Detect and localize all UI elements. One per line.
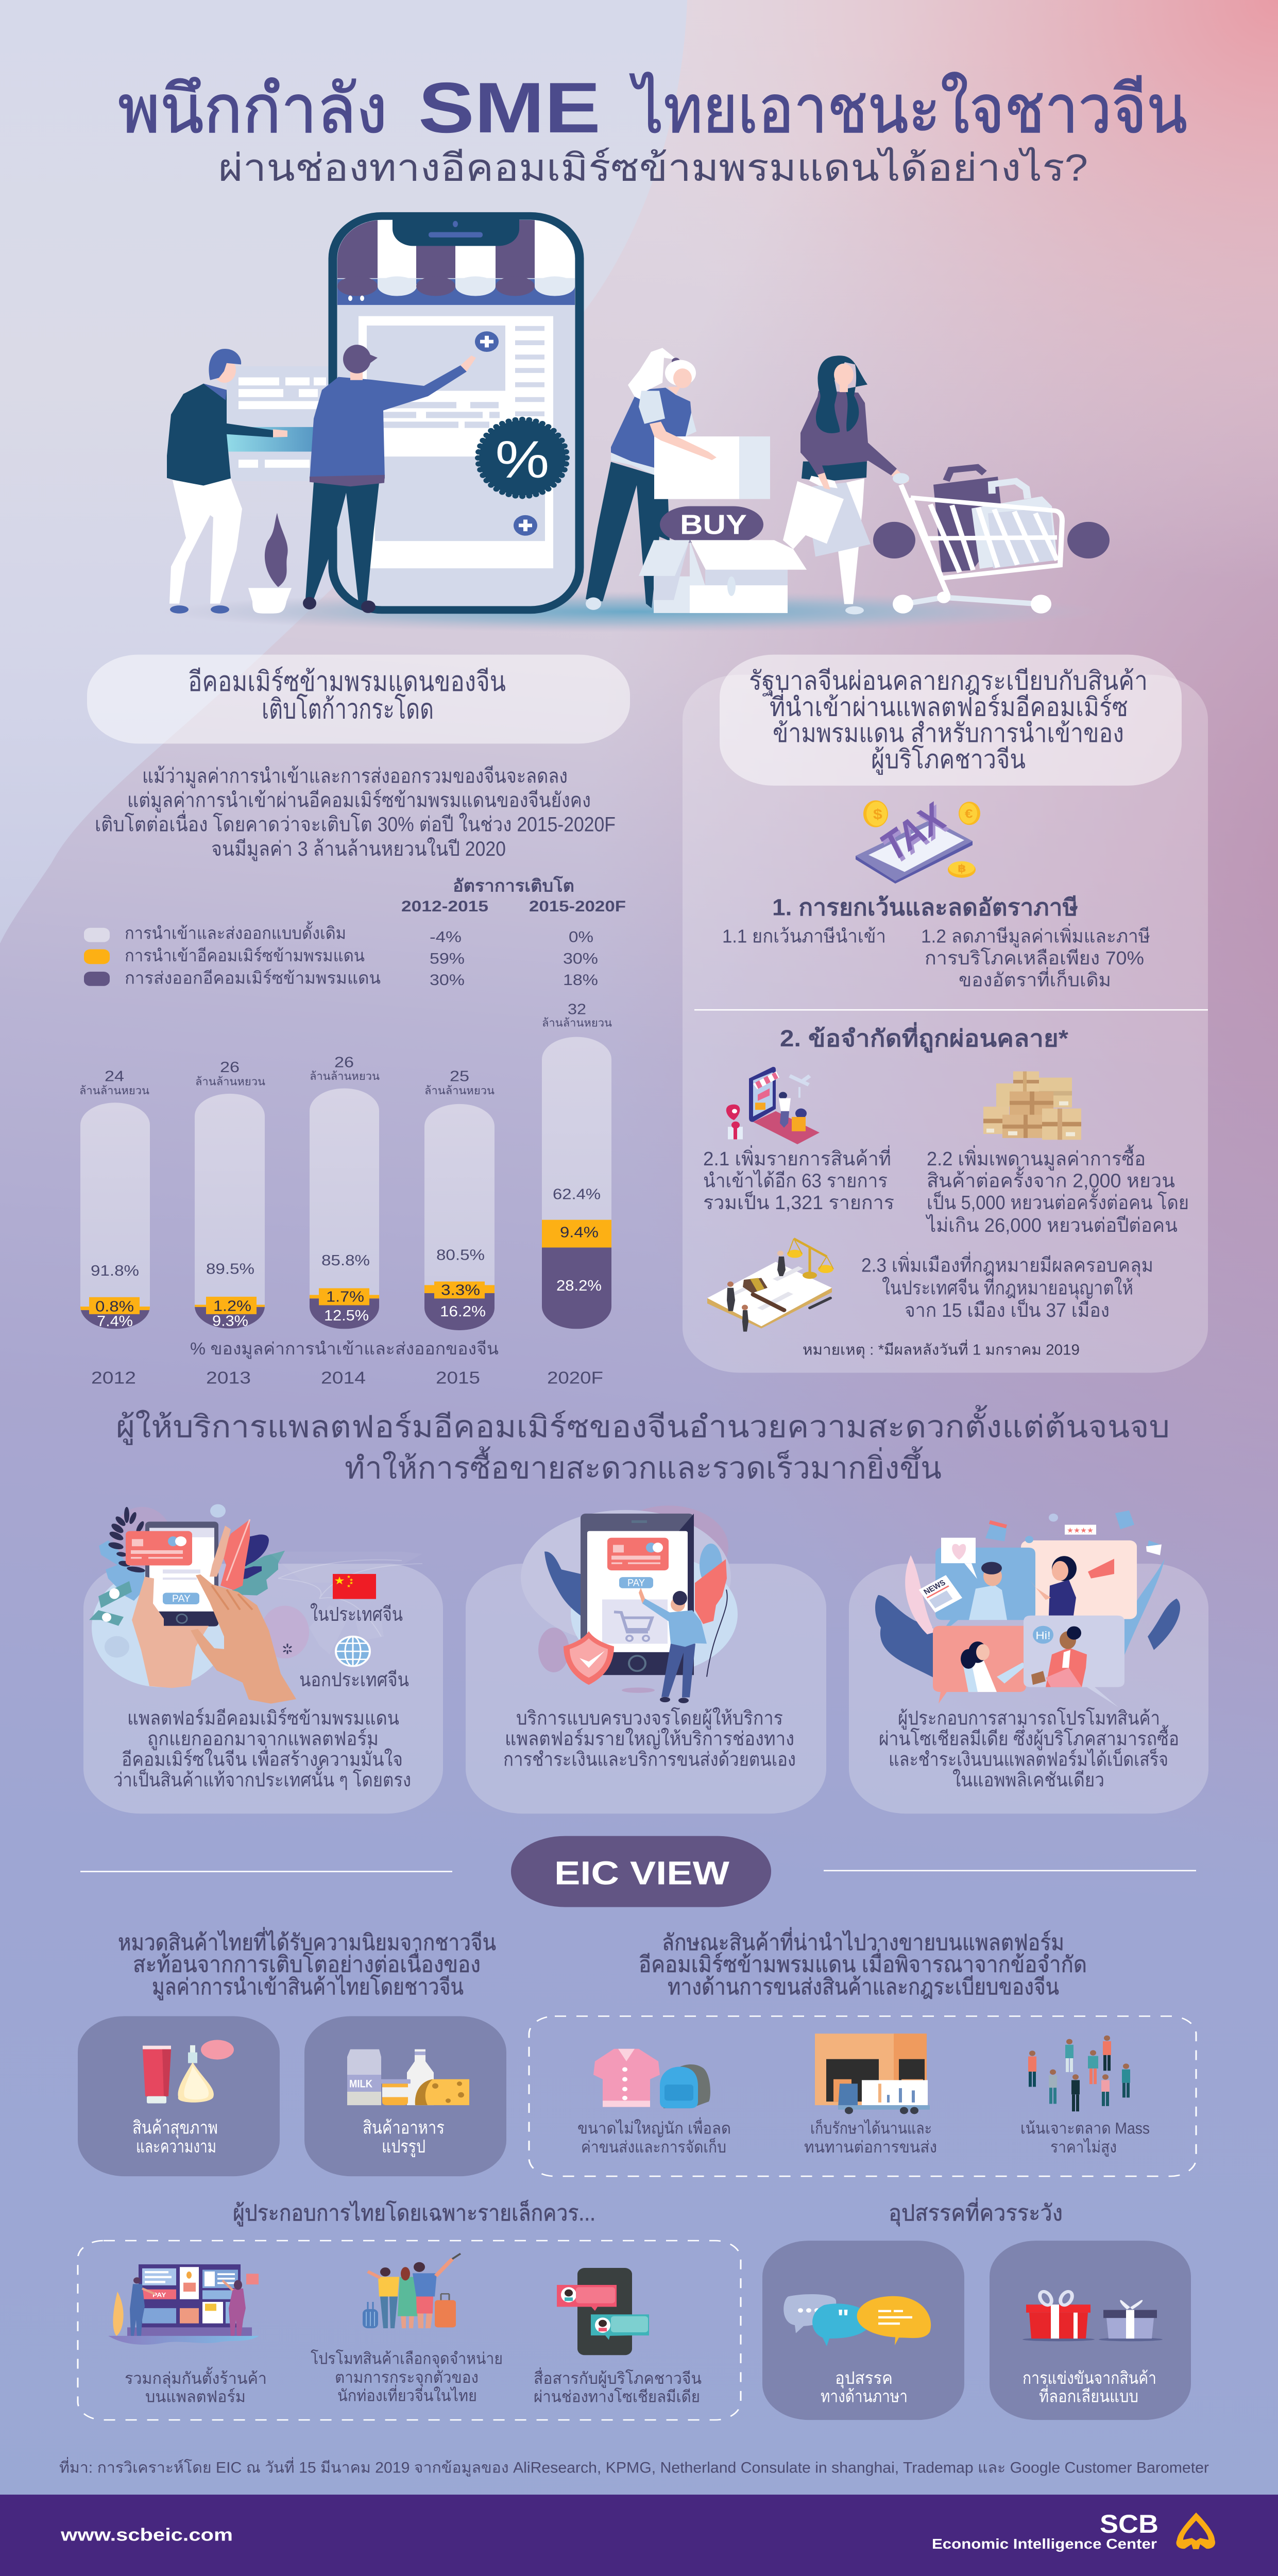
icon: china flag (333, 1574, 376, 1599)
card text: ถูกแยกออกมาจากแพลตฟอร์ม (147, 1728, 379, 1751)
icon: phone with chat bubbles (557, 2268, 649, 2355)
website: www.scbeic.com (60, 2524, 233, 2545)
bar 2015: 3.3% (441, 1281, 480, 1298)
chat bubble: lavender (1024, 1616, 1124, 1707)
action captions: โปรโมทสินค้าเลือกจุดจำหน่าย (311, 2349, 503, 2368)
paragraph: cross-border growth: จนมีมูลค่า 3 ล้านล้านหยวนในปี 2020 (211, 837, 506, 861)
bar 2015 (424, 1068, 495, 1387)
card label (363, 2117, 445, 2157)
growth rate table and legend: -4% (430, 928, 462, 945)
text 1.2: 1.2 ลดภาษีมูลค่าเพิ่มและภาษี (921, 923, 1150, 947)
growth rate table and legend: อัตราการเติบโต (453, 875, 574, 895)
card label: ที่ลอกเลียนแบบ (1039, 2384, 1138, 2406)
growth rate table and legend (84, 875, 626, 988)
pay button: PAY (627, 1578, 645, 1588)
bar 2014: 1.7% (326, 1289, 364, 1305)
credit card (126, 1531, 192, 1566)
chat bubble: blue (935, 1548, 1051, 1634)
heading: section 2: 2. ข้อจำกัดที่ถูกผ่อนคลาย* (780, 1022, 1068, 1053)
label: in china: ในประเทศจีน (310, 1603, 403, 1625)
trait captions: เน้นเจาะตลาด Mass (1020, 2120, 1150, 2138)
card: health and beauty (78, 2016, 280, 2176)
text 1.1: 1.1 ยกเว้นภาษีนำเข้า (722, 926, 886, 947)
credit card (607, 1538, 669, 1570)
trait captions: ค่าขนส่งและการจัดเก็บ (581, 2137, 726, 2157)
trait captions: ทนทานต่อการขนส่ง (804, 2138, 937, 2157)
icon: tax phone and coins: TAX (878, 796, 954, 874)
text 2.2: 2.2 เพิ่มเพดานมูลค่าการซื้อ (927, 1144, 1146, 1171)
card text (503, 1707, 796, 1770)
icon: globe (336, 1637, 370, 1666)
card text: อีคอมเมิร์ซในจีน เพื่อสร้างความมั่นใจ (122, 1745, 403, 1770)
bar 2013: 2013 (206, 1368, 251, 1387)
bar 2020F: 9.4% (560, 1224, 599, 1241)
trait captions: ขนาดไม่ใหญ่นัก เพื่อลด (577, 2117, 731, 2138)
bar 2015: 2015 (436, 1368, 480, 1387)
heading: obstacles: อุปสรรคที่ควรระวัง (889, 2198, 1063, 2227)
icon: speech bubbles: " (837, 2305, 849, 2330)
pay button: PAY (172, 1593, 191, 1604)
icon: phone checkout with shopper and shield (521, 1505, 738, 1703)
newspaper: NEWS (922, 1579, 947, 1597)
bar 2014: 26 (334, 1054, 354, 1071)
panel: left heading pill: อีคอมเมิร์ซข้ามพรมแดนของจีน (188, 666, 506, 697)
action captions: ผ่านช่องทางโซเชียลมีเดีย (534, 2387, 700, 2406)
bar 2013: 9.3% (212, 1312, 248, 1329)
growth rate table and legend: 2012-2015 (401, 897, 488, 914)
action captions: ตามการกระจุกตัวของ (335, 2368, 479, 2387)
panel heading: ที่นำเข้าผ่านแพลตฟอร์มอีคอมเมิร์ซ (770, 689, 1128, 722)
paragraph: cross-border growth: เติบโตต่อเนื่อง โดยคาดว่าจะเติบโต 30% ต่อปี ในช่วง 2015-2020F (95, 810, 616, 836)
bar 2020F (542, 1001, 612, 1387)
text 2.1: 2.1 เพิ่มรายการสินค้าที่ (703, 1145, 891, 1170)
bar 2012: 91.8% (91, 1262, 139, 1279)
heading: popular thai goods: สะท้อนจากการเติบโตอย่างต่อเนื่องของ (133, 1949, 481, 1977)
tourist in yellow (368, 2267, 399, 2328)
tourist in green (398, 2267, 418, 2328)
bar 2013: 1.2% (213, 1298, 251, 1314)
icon: tax phone and coins: € (965, 806, 973, 821)
icon: tax phone and coins: ฿ (958, 862, 966, 874)
card label: สินค้าสุขภาพ (132, 2117, 218, 2139)
panel: left heading pill: เติบโตก้าวกระโดด (262, 693, 434, 725)
card text: ผ่านโซเชียลมีเดีย ซึ่งผู้บริโภคสามารถซื้อ (879, 1725, 1179, 1751)
panel heading: ข้ามพรมแดน สำหรับการนำเข้าของ (773, 718, 1124, 748)
payment card behind man (227, 366, 340, 481)
icon: china flag: ★ (334, 1574, 345, 1587)
floating icons (985, 1511, 1162, 1555)
text 2.2 (925, 1144, 1189, 1236)
text 2.1: รวมเป็น 1,321 รายการ (703, 1191, 894, 1213)
chat bubble: peach (1021, 1540, 1137, 1619)
bar 2020F: ล้านล้านหยวน (542, 1016, 612, 1029)
text 1.2: การบริโภคเหลือเพียง 70% (925, 947, 1144, 969)
bar 2015: 16.2% (440, 1303, 486, 1320)
card: processed food (304, 2016, 506, 2176)
panel: full-service card (466, 1505, 826, 1814)
icon: social media chat (875, 1511, 1180, 1707)
open box (639, 540, 807, 613)
panel: regulation relaxation (683, 655, 1208, 1372)
left suitcase (363, 2302, 378, 2328)
bar 2013: 26 (220, 1059, 240, 1076)
growth rate table and legend: 2015-2020F (529, 897, 626, 914)
panel: product traits dashed (529, 2016, 1196, 2176)
newspaper (919, 1575, 962, 1613)
growth rate table and legend: การนำเข้าอีคอมเมิร์ซข้ามพรมแดน (125, 946, 365, 965)
card text: การชำระเงินและบริการขนส่งด้วยตนเอง (503, 1749, 796, 1770)
card label: สินค้าอาหาร (363, 2117, 445, 2138)
bar 2020F: 62.4% (553, 1186, 601, 1202)
bar 2012: ล้านล้านหยวน (79, 1084, 149, 1096)
growth rate table and legend: 0% (569, 928, 593, 945)
icon: cardboard boxes (983, 1072, 1081, 1140)
text 2.3 (861, 1251, 1153, 1321)
card label: การแข่งขันจากสินค้า (1023, 2368, 1156, 2387)
text 2.2: เป็น 5,000 หยวนต่อครั้งต่อคน โดย (927, 1188, 1189, 1213)
heading: popular thai goods: หมวดสินค้าไทยที่ได้รับความนิยมจากชาวจีน (118, 1927, 496, 1955)
heading: product traits (639, 1927, 1087, 1999)
paragraph: cross-border growth: แต่มูลค่าการนำเข้าผ่านอีคอมเมิร์ซข้ามพรมแดนของจีนยังคง (127, 789, 591, 813)
text 1.2: ของอัตราที่เก็บเดิม (959, 967, 1111, 991)
bar 2015: 25 (450, 1068, 469, 1084)
tourist with selfie stick (413, 2253, 461, 2328)
heading: platform convenience (116, 1404, 1170, 1485)
panel: recommended actions dashed (78, 2241, 741, 2420)
text 2.3: 2.3 เพิ่มเมืองที่กฎหมายมีผลครอบคลุม (861, 1251, 1153, 1277)
action captions: บนแพลตฟอร์ม (145, 2388, 246, 2406)
bar 2014: ล้านล้านหยวน (310, 1070, 380, 1082)
icon: store phone with courier (726, 1067, 820, 1144)
text 2.3: จาก 15 เมือง เป็น 37 เมือง (905, 1299, 1110, 1321)
growth rate table and legend: 30% (563, 950, 598, 967)
card label (132, 2117, 218, 2157)
pay button (619, 1577, 653, 1588)
growth rate table and legend: 18% (563, 971, 598, 988)
action captions (125, 2349, 702, 2406)
hero illustration: shoppers and phone storefront (162, 216, 1110, 632)
icon: speech bubbles (783, 2294, 931, 2346)
growth rate table and legend: 59% (430, 950, 465, 967)
trait captions: ราคาไม่สูง (1050, 2138, 1117, 2157)
text 2.1: นำเข้าได้อีก 63 รายการ (703, 1170, 888, 1192)
heading: product traits: ทางด้านการขนส่งสินค้าและกฎระเบียบของจีน (668, 1974, 1059, 1999)
bar 2014: 12.5% (324, 1307, 369, 1324)
card: language barrier (762, 2241, 964, 2420)
bar 2014: 85.8% (321, 1252, 370, 1269)
icon: china flag: ★ (349, 1581, 353, 1585)
buy sign (660, 506, 763, 543)
trait captions: เก็บรักษาได้นานและ (810, 2119, 932, 2138)
heart card (941, 1538, 977, 1579)
label: outside china: นอกประเทศจีน (299, 1669, 409, 1690)
bar 2020F: 32 (568, 1001, 586, 1018)
icon: shirt and backpack (593, 2049, 710, 2108)
icon: online store wall: PAY (152, 2291, 166, 2298)
icon: tax phone and coins: $ (873, 807, 882, 822)
bar 2014: 2014 (321, 1368, 366, 1387)
heading: section 1: 1. การยกเว้นและลดอัตราภาษี (772, 895, 1078, 921)
text 2.2: สินค้าต่อครั้งจาก 2,000 หยวน (927, 1166, 1175, 1192)
scb wordmark: Economic Intelligence Center (932, 2536, 1157, 2552)
stacked bar chart (79, 1001, 612, 1387)
icon: law book, gavel and scale (707, 1239, 833, 1332)
EIC VIEW banner: EIC VIEW (554, 1854, 730, 1891)
discount badge (478, 419, 567, 496)
text 2.3: ในประเทศจีน ที่กฎหมายอนุญาตให้ (882, 1274, 1133, 1300)
card label (821, 2368, 908, 2406)
heading: popular thai goods (118, 1927, 496, 2001)
ground shadow (162, 591, 1110, 632)
heading: popular thai goods: มูลค่าการนำเข้าสินค้าไทยโดยชาวจีน (152, 1974, 464, 2001)
phone storefront (333, 216, 580, 610)
card text: ผู้ประกอบการสามารถโปรโมทสินค้า (898, 1707, 1160, 1730)
icon: chinese tourists (363, 2253, 461, 2328)
bar 2012: 2012 (91, 1368, 136, 1387)
icon: tax phone and coins: TAX (876, 793, 951, 871)
icon: online store wall (108, 2264, 259, 2345)
icon: tax phone and coins (856, 793, 980, 884)
bar 2013 (195, 1059, 265, 1387)
chat bubble: lavender: Hi! (1035, 1630, 1051, 1641)
shopping cart (873, 467, 1110, 614)
right suitcase (435, 2294, 456, 2327)
icon: milk, bottle, jar, cheese: MILK (349, 2078, 373, 2090)
card label: ทางด้านภาษา (821, 2387, 908, 2406)
card label: อุปสรรค (835, 2368, 893, 2388)
bar 2015: ล้านล้านหยวน (424, 1084, 495, 1096)
scb logo (1176, 2513, 1215, 2549)
icon: china flag: ★ (347, 1584, 351, 1588)
text 1.2 (921, 923, 1150, 991)
bar 2013: 89.5% (206, 1261, 254, 1277)
card label: และความงาม (136, 2137, 216, 2157)
floating icons: ★★★★ (1067, 1527, 1094, 1535)
icon: hand holding phone with pay button (89, 1504, 309, 1704)
card text: บริการแบบครบวงจรโดยผู้ให้บริการ (516, 1707, 783, 1730)
growth rate table and legend: การนำเข้าและส่งออกแบบดั้งเดิม (125, 921, 346, 943)
bar 2012: 24 (105, 1068, 124, 1084)
card text: ในแอพพลิเคชันเดียว (952, 1769, 1104, 1791)
potted plant (248, 513, 292, 614)
icon: china flag: ★ (349, 1577, 353, 1582)
card label: แปรรูป (382, 2137, 425, 2157)
scb wordmark (932, 2509, 1158, 2552)
card text (113, 1707, 411, 1791)
card text: แพลตฟอร์มอีคอมเมิร์ซข้ามพรมแดน (127, 1707, 399, 1729)
panel heading (749, 666, 1148, 775)
icon: gifts (1023, 2290, 1163, 2341)
icon: china flag: ★ (347, 1574, 351, 1579)
buy sign: BUY (680, 509, 747, 540)
heading: platform convenience: ผู้ให้บริการแพลตฟอร์มอีคอมเมิร์ซของจีนอำนวยความสะดวกตั้งแต่ต้นจนจบ (116, 1404, 1170, 1445)
man with card (167, 349, 287, 614)
paragraph: cross-border growth (95, 765, 616, 861)
bar 2012: 7.4% (97, 1313, 133, 1330)
icon: cream tube and perfume (143, 2040, 234, 2104)
card text (879, 1707, 1179, 1791)
bar 2013: ล้านล้านหยวน (195, 1075, 265, 1088)
scb wordmark: SCB (1100, 2509, 1158, 2538)
text 2.2: ไม่เกิน 26,000 หยวนต่อปีต่อคน (925, 1214, 1178, 1236)
woman holding box (586, 348, 770, 610)
pay button (163, 1592, 199, 1604)
subtitle: ผ่านช่องทางอีคอมเมิร์ซข้ามพรมแดนได้อย่างไร? (218, 147, 1088, 189)
cart panel (602, 1599, 668, 1643)
chart axis caption: % ของมูลค่าการนำเข้าและส่งออกของจีน (190, 1339, 499, 1359)
card: counterfeit competition (990, 2241, 1191, 2420)
growth rate table and legend: การส่งออกอีคอมเมิร์ซข้ามพรมแดน (125, 969, 381, 988)
panel: left heading pill (87, 655, 630, 743)
title: SME (418, 67, 601, 148)
bar 2012 (79, 1068, 150, 1387)
heading: product traits: ลักษณะสินค้าที่น่านำไปวางขายบนแพลตฟอร์ม (662, 1927, 1064, 1955)
discount badge: % (496, 430, 549, 489)
heading: thai small operators: ผู้ประกอบการไทยโดยเฉพาะรายเล็กควร... (233, 2199, 595, 2227)
action captions: สื่อสารกับผู้บริโภคชาวจีน (534, 2367, 702, 2388)
bar 2012: 0.8% (95, 1298, 134, 1315)
icon: warehouse and truck (815, 2033, 930, 2114)
panel: platform separation card (83, 1504, 443, 1814)
panel heading: ผู้บริโภคชาวจีน (871, 745, 1026, 775)
man pointing at phone (303, 345, 476, 613)
shopper (639, 1588, 707, 1703)
card label (1023, 2368, 1156, 2406)
footnote: หมายเหตุ : *มีผลหลังวันที่ 1 มกราคม 2019 (803, 1340, 1080, 1359)
icon: crowd of people (1028, 2036, 1130, 2111)
icon: milk, bottle, jar, cheese (347, 2049, 469, 2105)
trait captions (577, 2117, 1150, 2157)
card text: ว่าเป็นสินค้าแท้จากประเทศนั้น ๆ โดยตรง (113, 1766, 411, 1791)
action captions: รวมกลุ่มกันตั้งร้านค้า (125, 2366, 267, 2388)
panel heading: รัฐบาลจีนผ่อนคลายกฎระเบียบกับสินค้า (749, 666, 1148, 696)
woman with bags (783, 355, 909, 615)
paragraph: cross-border growth: แม้ว่ามูลค่าการนำเข้าและการส่งออกรวมของจีนจะลดลง (142, 765, 568, 789)
card text: และชำระเงินบนแพลตฟอร์มได้เบ็ดเสร็จ (889, 1748, 1168, 1770)
card text: แพลตฟอร์มรายใหญ่ให้บริการช่องทาง (505, 1727, 794, 1750)
heading: product traits: อีคอมเมิร์ซข้ามพรมแดน เมื่อพิจารณาจากข้อจำกัด (639, 1949, 1087, 1977)
bar 2014 (310, 1054, 380, 1387)
title: พนึกกำลัง (118, 72, 387, 147)
bar 2020F: 2020F (547, 1368, 603, 1387)
world map (268, 1552, 422, 1654)
shield (564, 1631, 614, 1685)
heading: platform convenience: ทำให้การซื้อขายสะดวกและรวดเร็วมากยิ่งขึ้น (345, 1446, 942, 1485)
footer bar (0, 2495, 1278, 2576)
title (118, 67, 1187, 148)
bar 2015: 80.5% (436, 1247, 485, 1263)
bar 2020F: 28.2% (556, 1277, 602, 1294)
EIC VIEW banner (80, 1836, 1196, 1907)
chat bubble: salmon (933, 1626, 1026, 1704)
panel: social media promotion card (849, 1511, 1208, 1814)
text 2.1 (703, 1145, 894, 1213)
action captions: นักท่องเที่ยวจีนในไทย (337, 2384, 477, 2405)
growth rate table and legend: 30% (430, 971, 465, 988)
